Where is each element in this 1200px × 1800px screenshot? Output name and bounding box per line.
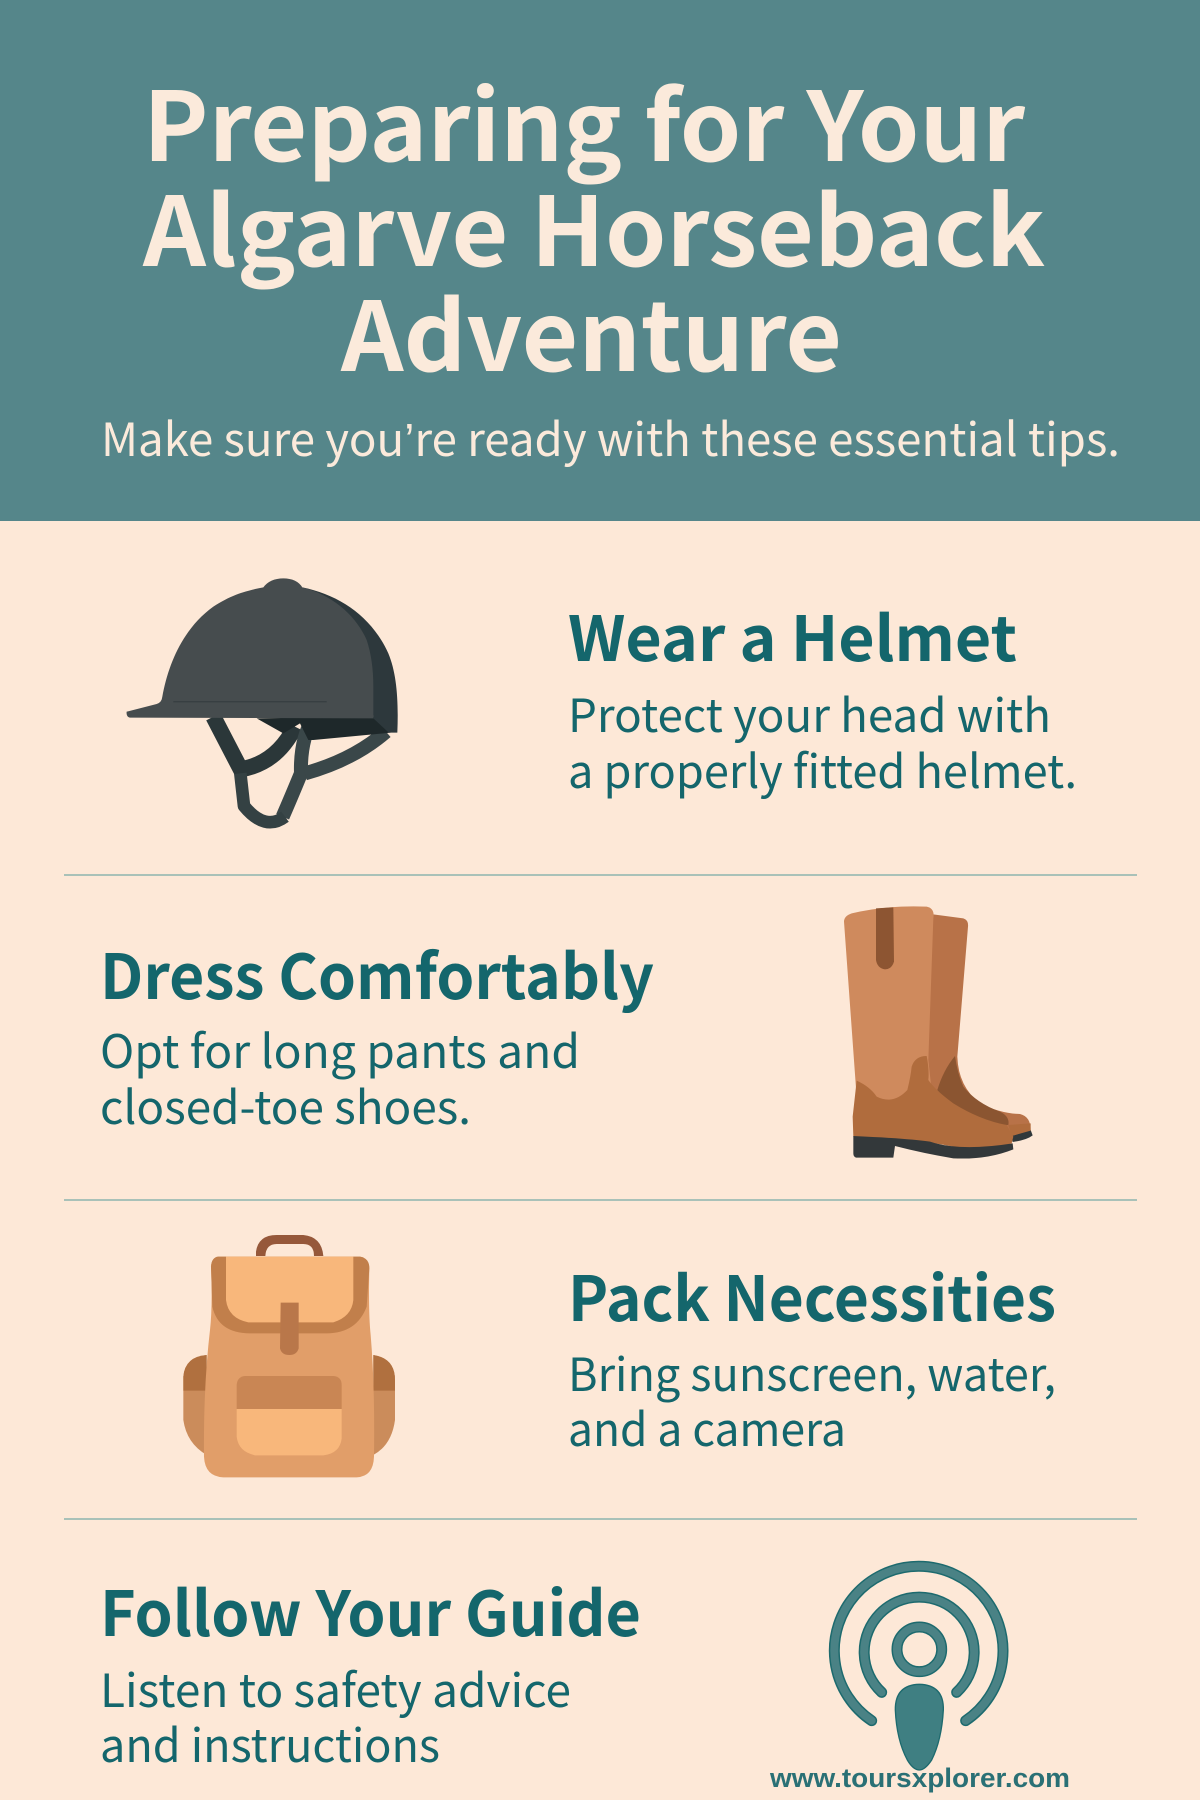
body text	[568, 1339, 1056, 1460]
body text	[568, 680, 1077, 802]
body text: and a camera	[568, 1394, 846, 1460]
body text: Bring sunscreen, water,	[568, 1339, 1056, 1405]
icon: backpack	[183, 1235, 395, 1477]
body text: Opt for long pants and	[100, 1016, 580, 1082]
header banner	[0, 0, 1200, 521]
heading: Dress Comfortably	[100, 927, 654, 1017]
icon: riding boots	[844, 906, 1033, 1159]
panel: follow your guide	[100, 1564, 1003, 1776]
heading: Wear a Helmet	[568, 589, 1017, 679]
subtitle: Make sure you’re ready with these essential tips.	[101, 404, 1120, 470]
title	[142, 50, 1045, 399]
body text: closed-toe shoes.	[100, 1072, 471, 1138]
heading: Follow Your Guide	[100, 1564, 641, 1654]
title: Algarve Horseback	[142, 155, 1045, 294]
icon: riding helmet	[127, 578, 398, 822]
icon: guide signal	[834, 1566, 1003, 1770]
body text: Protect your head with	[568, 680, 1051, 746]
panel: dress comfortably	[100, 906, 1033, 1159]
body text	[100, 1016, 580, 1138]
panel: pack necessities	[183, 1235, 1056, 1477]
body text: Listen to safety advice	[100, 1655, 571, 1721]
panel: wear a helmet	[127, 578, 1077, 822]
website url: www.toursxplorer.com	[769, 1763, 1070, 1793]
body text	[100, 1655, 571, 1776]
body text: a properly fitted helmet.	[568, 736, 1077, 802]
title: Preparing for Your	[143, 50, 1025, 189]
body text: and instructions	[100, 1710, 440, 1776]
heading: Pack Necessities	[568, 1249, 1056, 1339]
title: Adventure	[340, 260, 842, 399]
